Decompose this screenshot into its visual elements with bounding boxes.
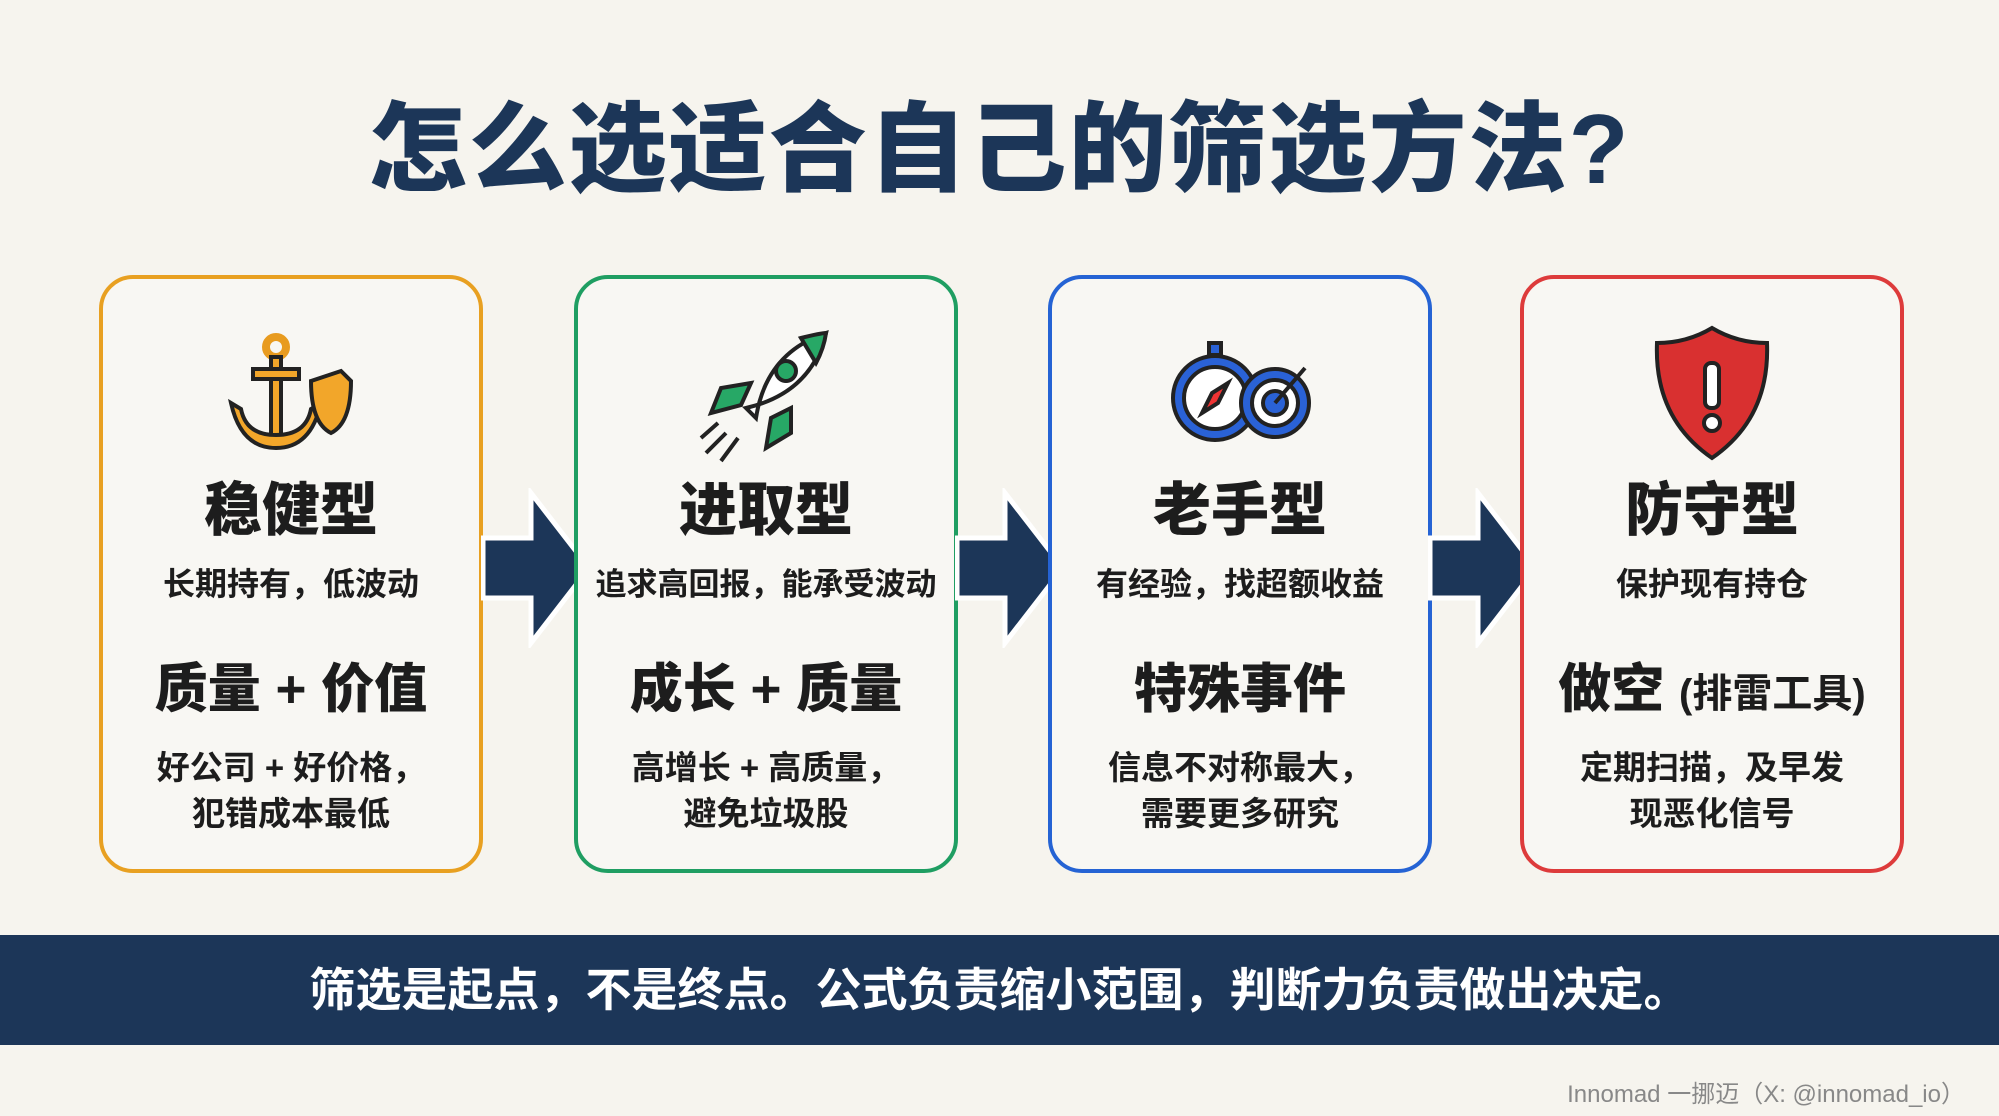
text: 高增长 + 高质量， (632, 749, 900, 786)
heading: 防守型 (1625, 478, 1799, 543)
text: 做空 (排雷工具) (1558, 660, 1866, 719)
text (157, 749, 425, 832)
text: 长期持有，低波动 (163, 566, 419, 602)
text: 定期扫描，及早发 (1580, 749, 1844, 786)
heading: 进取型 (679, 478, 853, 543)
arrow (481, 488, 574, 648)
panel: 稳健型 (99, 275, 483, 873)
text: 好公司 + 好价格， (157, 749, 425, 786)
text: 成长 + 质量 (630, 660, 902, 719)
banner (0, 935, 1999, 1045)
icon: rocket (700, 330, 829, 462)
heading: 稳健型 (204, 478, 378, 543)
icon: compass and target (1171, 341, 1311, 442)
icon: warning shield (1654, 326, 1770, 460)
title: 怎么选适合自己的筛选方法? (369, 94, 1630, 204)
text: 特殊事件 (1134, 660, 1346, 719)
text (632, 749, 900, 832)
banner: 筛选是起点，不是终点。公式负责缩小范围，判断力负责做出决定。 (310, 964, 1690, 1016)
arrow (1428, 488, 1520, 648)
arrow (955, 488, 1048, 648)
footer credit: Innomad 一挪迈（X: @innomad_io） (1567, 1081, 1965, 1108)
text: 保护现有持仓 (1616, 566, 1808, 602)
text: 质量 + 价值 (155, 660, 427, 719)
text: 现恶化信号 (1630, 795, 1794, 832)
text: 犯错成本最低 (192, 795, 390, 832)
text: 信息不对称最大， (1108, 749, 1372, 786)
text (1108, 749, 1372, 832)
text (1580, 749, 1844, 832)
panel: 进取型 (574, 275, 958, 873)
text: 追求高回报，能承受波动 (596, 567, 936, 602)
panel: 老手型 (1048, 275, 1432, 873)
heading: 老手型 (1153, 478, 1327, 543)
icon: anchor shield (228, 333, 353, 450)
panel: 防守型 (1520, 275, 1904, 873)
text: 有经验，找超额收益 (1096, 566, 1384, 602)
text: 避免垃圾股 (684, 795, 848, 832)
text: 需要更多研究 (1141, 795, 1339, 832)
